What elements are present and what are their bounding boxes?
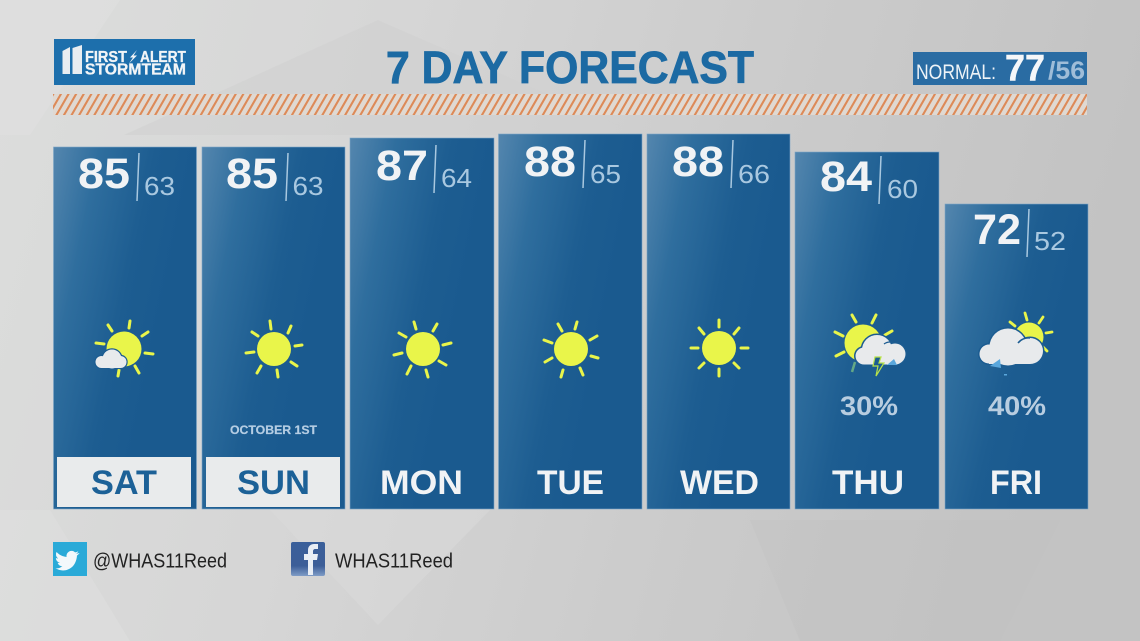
- normal temperatures box: 77: [1005, 48, 1045, 88]
- high and low: Friday: 72: [973, 206, 1021, 254]
- day label: WED: WED: [680, 464, 759, 502]
- icon: Facebook: [291, 542, 325, 576]
- day label box: SAT: [57, 457, 191, 507]
- panel: Monday: [350, 138, 494, 509]
- day label: MON: MON: [380, 464, 463, 502]
- high and low: Saturday: 63: [144, 171, 175, 201]
- high and low: Thursday: [820, 153, 918, 204]
- icon: sunny: [394, 322, 451, 377]
- social: Twitter handle: @WHAS11Reed: [93, 550, 227, 572]
- high and low: Tuesday: [524, 138, 621, 189]
- day label: THU: THU: [832, 464, 904, 502]
- icon: sunny: [544, 322, 598, 377]
- icon: sunny: [246, 321, 302, 377]
- logo: First Alert Storm Team: STORMTEAM: [85, 62, 186, 78]
- day label: TUE: TUE: [537, 464, 604, 502]
- precipitation chance: 40%: 40%: [988, 391, 1046, 421]
- normal temperatures box: /56: [1048, 57, 1085, 85]
- panel: Sunday: [202, 147, 345, 509]
- icon: rain with clouds and sun: [980, 313, 1052, 376]
- hatched divider: [53, 94, 1087, 115]
- social: Facebook handle: WHAS11Reed: [335, 550, 453, 572]
- icon: Twitter: [53, 542, 87, 576]
- icon: storms with sun: [835, 315, 906, 376]
- social: Facebook handle: [291, 542, 453, 576]
- day label box: SAT: SAT: [91, 464, 157, 502]
- high and low: Wednesday: 66: [738, 159, 770, 189]
- high and low: Thursday: 84: [820, 153, 872, 201]
- icon: mostly sunny: [96, 321, 153, 376]
- high and low: Monday: 64: [441, 163, 472, 193]
- panel: Wednesday: [647, 134, 790, 509]
- high and low: Wednesday: [672, 138, 770, 189]
- icon: sunny: [691, 320, 748, 376]
- high and low: Monday: 87: [376, 142, 428, 190]
- logo: First Alert Storm Team: FIRST: [85, 49, 127, 66]
- high and low: Tuesday: 65: [590, 159, 621, 189]
- high and low: Sunday: 63: [292, 171, 324, 201]
- day label: FRI: FRI: [990, 464, 1042, 502]
- panel: Thursday: [795, 152, 939, 509]
- high and low: Saturday: 85: [78, 150, 130, 198]
- day label box: SUN: [206, 457, 340, 507]
- high and low: Wednesday: 88: [672, 138, 724, 186]
- high and low: Tuesday: 88: [524, 138, 576, 186]
- high and low: Friday: 52: [1034, 226, 1066, 256]
- logo: First Alert Storm Team: ALERT: [140, 49, 186, 66]
- panel: Friday: [945, 204, 1088, 509]
- title: 7 DAY FORECAST: [386, 42, 754, 93]
- panel: Tuesday: [498, 134, 642, 509]
- social: Twitter handle: [53, 542, 227, 576]
- day label box: SUN: SUN: [237, 464, 310, 502]
- logo: First Alert Storm Team: [54, 39, 195, 85]
- panel: Saturday: [54, 147, 196, 509]
- high and low: Monday: [376, 142, 472, 193]
- high and low: Saturday: [78, 150, 175, 201]
- precipitation chance: 30%: 30%: [840, 391, 898, 421]
- high and low: Sunday: [226, 150, 324, 201]
- date note: OCTOBER 1ST: [230, 425, 317, 437]
- normal temperatures box: NORMAL:: [916, 61, 996, 84]
- high and low: Thursday: 60: [887, 174, 918, 204]
- high and low: Friday: [973, 206, 1066, 257]
- normal temperatures box: [913, 48, 1087, 88]
- high and low: Sunday: 85: [226, 150, 278, 198]
